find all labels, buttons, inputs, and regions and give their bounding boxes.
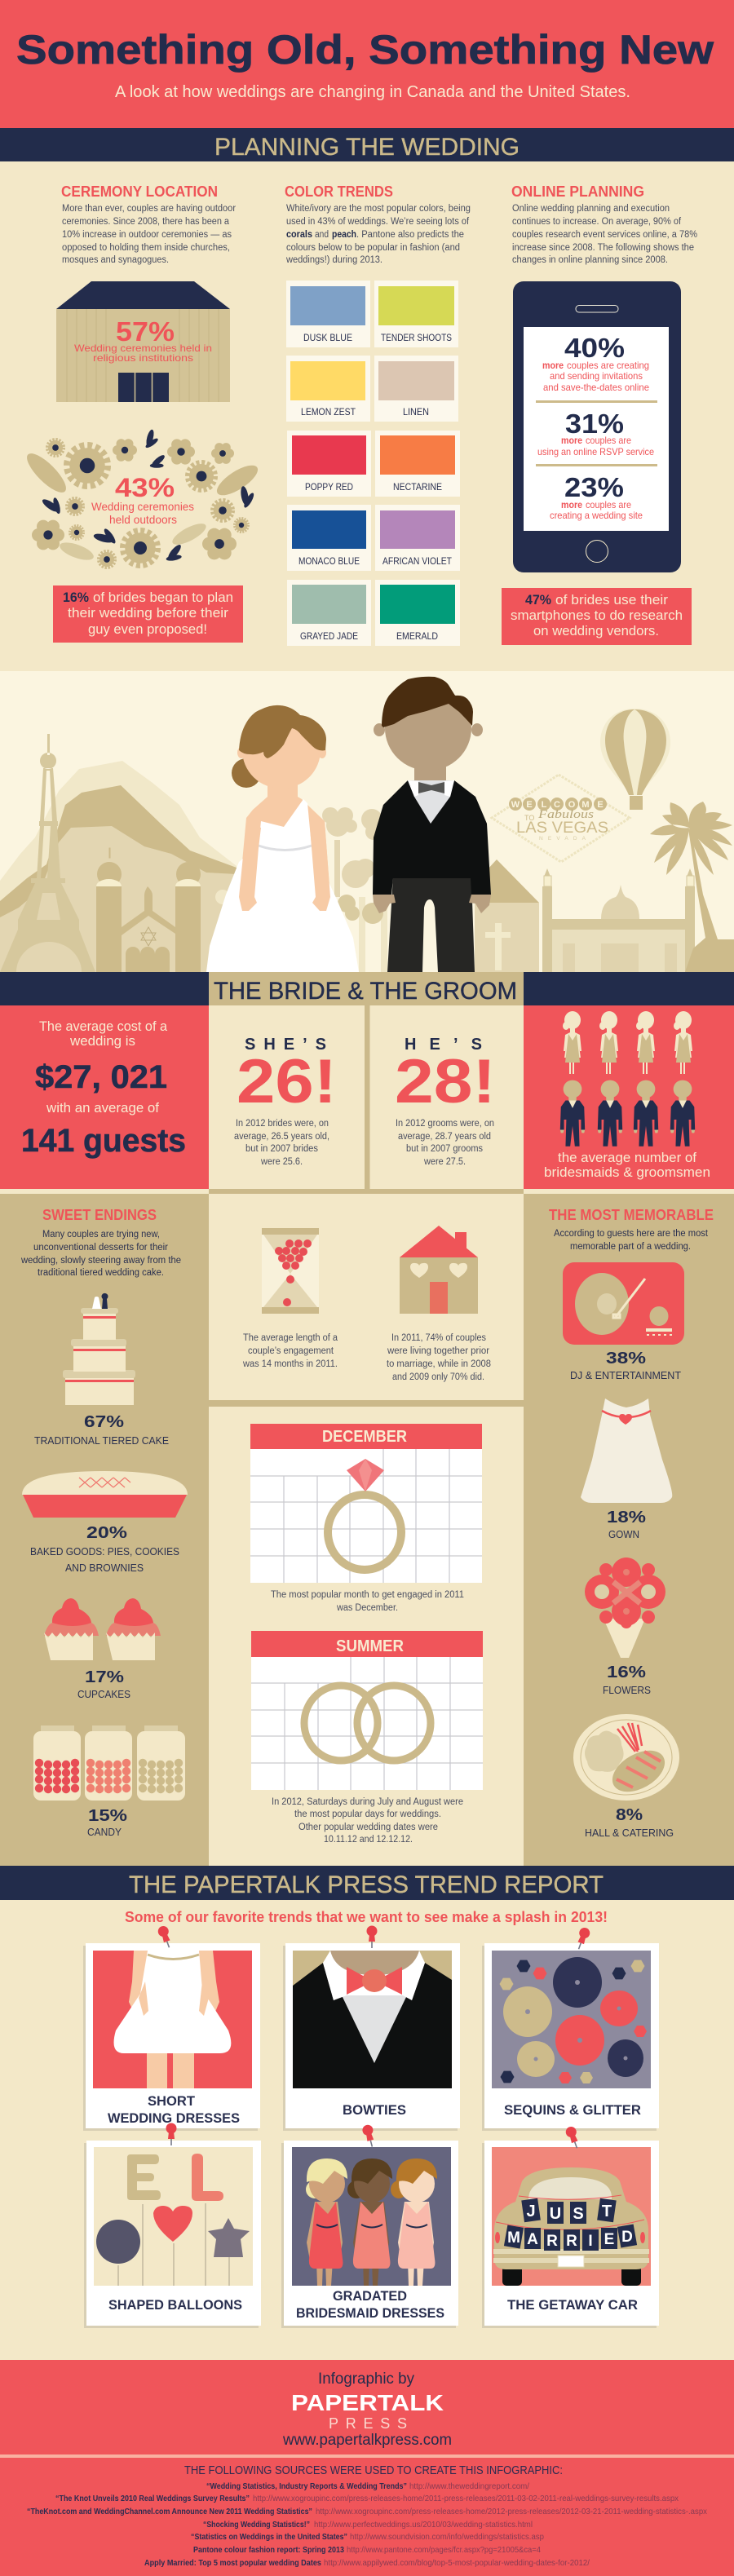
swatch: dusk blue: DUSK BLUE — [303, 334, 352, 343]
stat: 17% cupcakes: 17% — [85, 1668, 124, 1686]
text: living together: were living together prior — [387, 1346, 489, 1356]
footer: credits — [0, 2360, 734, 2576]
panel: the most memorable — [549, 1207, 714, 1839]
text: popular month — [271, 1590, 464, 1613]
swatch: african violet: AFRICAN VIOLET — [382, 557, 452, 567]
panel: groom age: but in 2007 grooms — [406, 1144, 483, 1154]
panel: bridesmaids and groomsmen — [524, 1005, 734, 1189]
swatch: linen: LINEN — [403, 408, 429, 418]
icon: candy jars — [33, 1725, 185, 1801]
icon: hourglass — [262, 1228, 319, 1314]
footer: sources: “Wedding Statistics, Industry Reports & Wedding Trends” — [206, 2481, 407, 2491]
bride — [206, 705, 359, 972]
icon: phone with stats: 40% — [564, 333, 625, 363]
callout: 16% of brides — [53, 585, 243, 643]
card: short wedding dresses — [83, 1924, 260, 2131]
banner: married — [504, 2224, 637, 2251]
text block: desserts: wedding, slowly steering away from the — [20, 1256, 181, 1266]
panel: color trends — [285, 183, 471, 646]
footer: sources: “Shocking Wedding Statistics!” — [203, 2520, 310, 2530]
panel: sweet endings — [20, 1207, 188, 1838]
heading: sweet endings: SWEET ENDINGS — [42, 1207, 157, 1223]
banner: just: U — [550, 2205, 561, 2223]
card: shaped balloons: SHAPED BALLOONS — [108, 2297, 242, 2313]
heading: ceremony location: CEREMONY LOCATION — [61, 183, 218, 200]
panel: bridesmaids and groomsmen: bridesmaids & groomsmen — [544, 1164, 710, 1180]
icon: church 57%: 57% — [116, 316, 175, 347]
stat: 20% baked goods — [30, 1524, 179, 1574]
text block: online description: changes in online planning since 2008. — [512, 255, 668, 265]
stat: 16% flowers: FLOWERS — [603, 1684, 651, 1696]
text block: desserts: Many couples are trying new, — [42, 1230, 160, 1239]
figure: bridesmaid 2 — [347, 2158, 392, 2286]
section heading: planning the wedding — [0, 128, 734, 161]
stat: 38% DJ — [570, 1350, 681, 1381]
text block: online description — [512, 204, 697, 265]
text block: color description: used in 43% of weddings. We’re seeing lots of — [286, 217, 470, 227]
text block: color description — [285, 204, 471, 265]
icon: wedding rings — [304, 1686, 431, 1761]
text: living together — [387, 1333, 491, 1382]
text: popular dates: the most popular days for weddings. — [294, 1809, 441, 1819]
text block: memorable description: memorable part of a wedding. — [570, 1242, 691, 1252]
card: bowties: BOWTIES — [343, 2102, 406, 2118]
panel: bride age: but in 2007 brides — [245, 1144, 318, 1154]
text block: online description: couples research event services online, a 78% — [512, 230, 697, 240]
palace — [542, 868, 695, 972]
hot air balloon — [600, 709, 670, 810]
footer: credits: www.papertalkpress.com — [282, 2432, 452, 2449]
panel: average cost: 141 guests — [21, 1123, 186, 1159]
swatch: grayed jade: GRAYED JADE — [300, 632, 358, 642]
icon: phone with stats: couples are creating — [567, 360, 649, 371]
groom — [373, 677, 491, 972]
trees — [215, 807, 387, 972]
panel: average cost — [0, 1005, 209, 1189]
text block: color description: weddings!) during 2013. — [285, 255, 382, 265]
stat: 15% candy: CANDY — [87, 1826, 122, 1838]
text block: ceremony description: ceremonies. Since 2008, there has been a — [62, 217, 230, 227]
title: Something Old, Something New — [16, 27, 714, 73]
panel: summer calendar — [251, 1631, 483, 1845]
mountains — [0, 761, 237, 972]
card: short wedding dresses: SHORT — [148, 2093, 196, 2109]
panel: groom age: HE’S — [405, 1036, 482, 1054]
subtitle: A look at how weddings are changing in Canada and the United States. — [115, 82, 630, 101]
text block: ceremony description: mosques and synagogues. — [62, 255, 169, 265]
icon: bridesmaids — [563, 1011, 692, 1074]
callout: 47% of brides: smartphones to do research — [511, 608, 683, 623]
callout: 47% of brides: of brides use their — [555, 592, 668, 608]
card: gradated bridesmaid dresses: GRADATED — [333, 2288, 407, 2304]
banner: married: D — [621, 2229, 633, 2246]
footer: credits: PAPERTALK — [291, 2390, 444, 2415]
icon: church 57%: religious institutions — [93, 352, 193, 364]
panel: bride age: SHE’S — [245, 1036, 326, 1054]
mosque and synagogue — [96, 848, 201, 972]
stat: 20% baked goods: BAKED GOODS: PIES, COOKIES — [30, 1545, 179, 1558]
icon: phone with stats: couples are — [586, 499, 631, 510]
text block: color description: White/ivory are the most popular colors, being — [286, 204, 471, 214]
las vegas sign: L — [542, 800, 547, 810]
panel: groom age: In 2012 grooms were, on — [396, 1119, 494, 1129]
footer: sources: http://www.xogroupinc.com/press-releases-home/2011-press-releases/2011-03-02-2011-real-weddings-survey-results.aspx — [253, 2494, 679, 2503]
text block: online description: Online wedding planning and execution — [512, 204, 670, 214]
panel: average cost: $27, 021 — [35, 1059, 167, 1095]
text block: color description: colours below to be popular in fashion (and — [286, 243, 460, 253]
text block: color description: and — [315, 230, 329, 240]
icon: church 57%: Wedding ceremonies held in — [74, 342, 212, 354]
footer: sources: Apply Married: Top 5 most popular wedding Dates — [144, 2558, 321, 2568]
stat: 8% hall and catering — [585, 1806, 674, 1839]
background: planning section — [0, 161, 734, 671]
swatch: monaco blue — [287, 505, 371, 571]
panel: december calendar — [250, 1424, 482, 1613]
stat: 15% candy — [87, 1807, 127, 1838]
section heading: the bride and the groom — [0, 972, 734, 1005]
section heading: trend report: THE PAPERTALK PRESS TREND REPORT — [129, 1871, 604, 1898]
text block: color description: peach — [332, 230, 356, 240]
footer: credits: Infographic by — [318, 2371, 414, 2388]
figure: bridesmaid 3 — [391, 2158, 437, 2286]
footer: sources: http://www.perfectweddings.us/2010/03/wedding-statistics.html — [314, 2520, 533, 2530]
card: bowties — [283, 1926, 460, 2131]
footer: sources: “TheKnot.com and WeddingChannel.com Announce New 2011 Wedding Statistics” — [27, 2507, 312, 2516]
stat: 16% flowers: 16% — [607, 1664, 646, 1681]
swatch: lemon zest — [286, 356, 370, 422]
section heading: trend report — [0, 1866, 734, 1900]
icon: house — [400, 1226, 478, 1314]
banner: married: R — [546, 2233, 558, 2250]
banner: just — [521, 2198, 617, 2224]
icon: gown — [581, 1398, 672, 1503]
panel: december calendar: DECEMBER — [322, 1428, 408, 1446]
text: living together: to marriage, while in 2008 — [387, 1359, 491, 1369]
icon: phone with stats: and save-the-dates online — [543, 382, 649, 393]
card: sequins and glitter: SEQUINS & GLITTER — [504, 2102, 641, 2118]
panel: average cost: The average cost of a — [39, 1018, 168, 1034]
figure: bridesmaid 1 — [306, 2158, 347, 2286]
swatch: african violet — [375, 505, 460, 571]
panel: summer calendar: SUMMER — [336, 1637, 405, 1655]
card: the getaway car: THE GETAWAY CAR — [507, 2297, 638, 2313]
stat: 15% candy: 15% — [88, 1807, 127, 1825]
heading: online planning: ONLINE PLANNING — [511, 183, 644, 200]
stat: 67% cake: TRADITIONAL TIERED CAKE — [34, 1434, 169, 1447]
banner: just: S — [573, 2205, 584, 2223]
icon: phone with stats: creating a wedding site — [550, 510, 643, 521]
las vegas sign: LAS VEGAS — [516, 820, 608, 837]
text: popular dates — [272, 1797, 463, 1845]
footer: sources: THE FOLLOWING SOURCES WERE USED TO CREATE THIS INFOGRAPHIC: — [184, 2463, 563, 2477]
text: living together: In 2011, 74% of couples — [391, 1333, 486, 1343]
las vegas sign — [492, 775, 630, 862]
card: sequins and glitter — [482, 1926, 659, 2131]
heading: color trends: COLOR TRENDS — [285, 183, 393, 200]
stat: 17% cupcakes: CUPCAKES — [77, 1688, 130, 1700]
banner: married: M — [507, 2229, 520, 2247]
stat: 8% hall and catering: HALL & CATERING — [585, 1827, 674, 1839]
swatch: tender shoots — [374, 281, 458, 347]
heading: the most memorable: THE MOST MEMORABLE — [549, 1207, 714, 1223]
stat: 17% cupcakes — [77, 1668, 130, 1700]
las vegas sign: O — [568, 800, 576, 810]
text: living together: and 2009 only 70% did. — [392, 1372, 484, 1382]
panel: ceremony location — [22, 183, 262, 643]
panel: bride age: 26! — [237, 1047, 337, 1116]
las vegas sign: W — [511, 800, 520, 810]
icon: cupcakes — [44, 1598, 161, 1660]
las vegas sign: NEVADA — [539, 836, 586, 842]
icon: phone with stats: more — [542, 360, 564, 371]
panel: engagement and living together — [242, 1226, 491, 1382]
swatch: lemon zest: LEMON ZEST — [301, 408, 356, 418]
swatch: emerald — [375, 580, 460, 646]
footer: sources: http://www.appilywed.com/blog/top-5-most-popular-wedding-dates-for-2012/ — [324, 2558, 590, 2568]
callout: 47% of brides — [502, 588, 692, 645]
text block: online description: increase since 2008. The following shows the — [512, 243, 694, 253]
footer: sources — [27, 2463, 708, 2568]
footer: sources: http://www.soundvision.com/info/weddings/statistics.asp — [350, 2532, 544, 2542]
stat: 20% baked goods: AND BROWNIES — [65, 1562, 144, 1574]
section heading: the bride and the groom: THE BRIDE & THE GROOM — [214, 978, 517, 1005]
icon: phone with stats: using an online RSVP service — [537, 446, 654, 457]
banner: just: J — [526, 2203, 536, 2220]
icon: turntable — [563, 1262, 684, 1345]
text: popular month: was December. — [336, 1603, 398, 1613]
footer: sources: “The Knot Unveils 2010 Real Weddings Survey Results” — [55, 2494, 250, 2503]
card: gradated bridesmaid dresses: BRIDESMAID DRESSES — [296, 2305, 444, 2321]
stat: 67% cake: 67% — [84, 1413, 124, 1431]
text block: ceremony description: 10% increase in outdoor ceremonies — as — [62, 230, 232, 240]
las vegas sign: M — [581, 800, 590, 810]
text: engagement length: was 14 months in 2011. — [242, 1359, 338, 1369]
icon: phone with stats: more — [561, 499, 582, 510]
panel: groom age: were 27.5. — [423, 1157, 466, 1167]
text block: ceremony description: opposed to holding them inside churches, — [62, 243, 230, 253]
text block: desserts: unconventional desserts for their — [33, 1243, 168, 1253]
callout: 16% of brides: their wedding before their — [68, 605, 228, 621]
panel: groom age: average, 28.7 years old — [398, 1132, 491, 1142]
text block: memorable description: According to guests here are the most — [554, 1229, 709, 1239]
panel: average cost: with an average of — [46, 1100, 159, 1116]
icon: wedding cake — [63, 1293, 135, 1405]
swatch: monaco blue: MONACO BLUE — [298, 557, 360, 567]
icon: phone with stats: couples are — [586, 435, 631, 446]
swatch: linen — [374, 356, 458, 422]
icon: phone with stats: 31% — [565, 409, 624, 439]
text: engagement length — [242, 1333, 338, 1369]
footer: sources: “Statistics on Weddings in the United States” — [191, 2532, 347, 2542]
text: engagement length: couple’s engagement — [248, 1346, 334, 1356]
section heading: planning the wedding: PLANNING THE WEDDING — [214, 134, 520, 161]
las vegas sign: Fabulous — [537, 808, 594, 821]
callout: 16% of brides: of brides began to plan — [93, 590, 233, 605]
illustration: bride and groom scene — [0, 671, 734, 973]
las vegas sign: TO — [524, 814, 534, 822]
text: engagement length: The average length of a — [243, 1333, 338, 1343]
text block: desserts — [20, 1230, 181, 1278]
icon: phone with stats — [513, 281, 681, 572]
swatch: tender shoots: TENDER SHOOTS — [381, 334, 452, 343]
footer: sources: http://www.pantone.com/pages/fcr.aspx?pg=21005&ca=4 — [347, 2545, 541, 2555]
panel: bride age — [209, 1005, 365, 1189]
callout: 16% of brides: 16% — [63, 590, 89, 605]
banner: married: A — [527, 2231, 538, 2248]
banner: married: I — [588, 2233, 593, 2250]
stat: 18% gown: GOWN — [608, 1528, 639, 1540]
callout: 16% of brides: guy even proposed! — [88, 621, 207, 637]
panel: bride age: In 2012 brides were, on — [236, 1119, 329, 1129]
swatch: dusk blue — [286, 281, 370, 347]
icon: groomsmen — [560, 1080, 695, 1147]
card: shaped balloons — [84, 2123, 261, 2328]
icon: pie — [22, 1471, 188, 1518]
banner: married: R — [566, 2233, 577, 2250]
icon: flower wreath 43% — [22, 426, 262, 568]
panel: groom age: 28! — [395, 1047, 496, 1116]
panel: groom age — [370, 1005, 524, 1189]
icon: phone with stats: and sending invitations — [550, 370, 643, 382]
icon: phone with stats: 23% — [564, 472, 624, 502]
illustration: car — [493, 2167, 649, 2286]
icon: bouquet — [585, 1558, 665, 1658]
icon: church 57% — [56, 281, 230, 402]
icon: dinner plate — [573, 1714, 679, 1801]
stat: 8% hall and catering: 8% — [616, 1806, 643, 1824]
stat: 38% DJ: 38% — [606, 1350, 646, 1368]
intro line: Some of our favorite trends that we want to see make a splash in 2013! — [125, 1909, 608, 1925]
text: popular dates: Other popular wedding dates were — [298, 1823, 438, 1832]
banner: just: T — [602, 2203, 612, 2220]
swatch: poppy red — [287, 431, 371, 497]
footer: sources: http://www.xogroupinc.com/press-releases-home/2012-press-releases/2012-03-21-2011-wedding-statistics-.aspx — [316, 2507, 708, 2516]
las vegas sign: E — [597, 800, 604, 810]
swatch: nectarine: NECTARINE — [393, 483, 442, 493]
stat: 18% gown: 18% — [607, 1509, 646, 1527]
text block: memorable description — [554, 1229, 709, 1252]
palm tree — [650, 802, 734, 972]
text block: ceremony description: More than ever, couples are having outdoor — [62, 204, 236, 214]
background: trend report — [0, 1900, 734, 2360]
text: popular dates: 10.11.12 and 12.12.12. — [324, 1835, 413, 1845]
panel: bridesmaids and groomsmen: the average number of — [558, 1150, 696, 1165]
cross church and pyramid — [469, 859, 539, 972]
text: popular dates: In 2012, Saturdays during July and August were — [272, 1797, 463, 1807]
background: lower columns — [0, 1189, 734, 1867]
stat: 38% DJ: DJ & ENTERTAINMENT — [570, 1369, 681, 1381]
footer: sources: http://www.theweddingreport.com/ — [409, 2481, 529, 2491]
swatch: emerald: EMERALD — [396, 632, 438, 642]
stat: 18% gown — [607, 1509, 646, 1540]
panel: bride age: were 25.6. — [260, 1157, 303, 1167]
header banner — [0, 0, 734, 128]
icon: flower wreath 43%: Wedding ceremonies — [91, 500, 194, 513]
swatch: grayed jade — [287, 580, 371, 646]
card: short wedding dresses: WEDDING DRESSES — [108, 2110, 240, 2126]
swatch: nectarine — [375, 431, 460, 497]
text: popular month: The most popular month to get engaged in 2011 — [271, 1590, 464, 1600]
panel: bride age: average, 26.5 years old, — [234, 1132, 329, 1142]
eiffel tower — [0, 734, 95, 972]
icon: flower wreath 43%: 43% — [115, 473, 175, 502]
text block: color description: corals — [286, 230, 312, 240]
las vegas sign: E — [526, 800, 533, 810]
text block: color description: . Pantone also predicts the — [356, 230, 464, 240]
card: gradated bridesmaid dresses — [281, 2123, 458, 2328]
swatch: poppy red: POPPY RED — [305, 483, 353, 493]
background: tan grid — [209, 1005, 524, 1194]
text block: online description: continues to increase. On average, 90% of — [512, 217, 682, 227]
panel: average cost: wedding is — [69, 1033, 135, 1049]
text block: ceremony description — [62, 204, 236, 265]
icon: flower wreath 43%: held outdoors — [109, 513, 177, 526]
card: the getaway car — [482, 2125, 659, 2328]
icon: engagement ring — [328, 1459, 401, 1570]
panel: online planning — [502, 183, 697, 645]
callout: 47% of brides: on wedding vendors. — [533, 623, 659, 638]
banner: married: E — [604, 2231, 614, 2248]
footer: sources: Pantone colour fashion report: Spring 2013 — [193, 2545, 344, 2555]
footer: credits: PRESS — [329, 2415, 407, 2432]
callout: 47% of brides: 47% — [525, 592, 551, 608]
icon: phone with stats: more — [561, 435, 582, 446]
stat: 67% cake — [34, 1413, 169, 1447]
text block: desserts: traditional tiered wedding cake. — [38, 1268, 164, 1278]
stat: 16% flowers — [603, 1664, 651, 1696]
stat: 20% baked goods: 20% — [86, 1524, 127, 1542]
las vegas sign: C — [554, 800, 560, 810]
